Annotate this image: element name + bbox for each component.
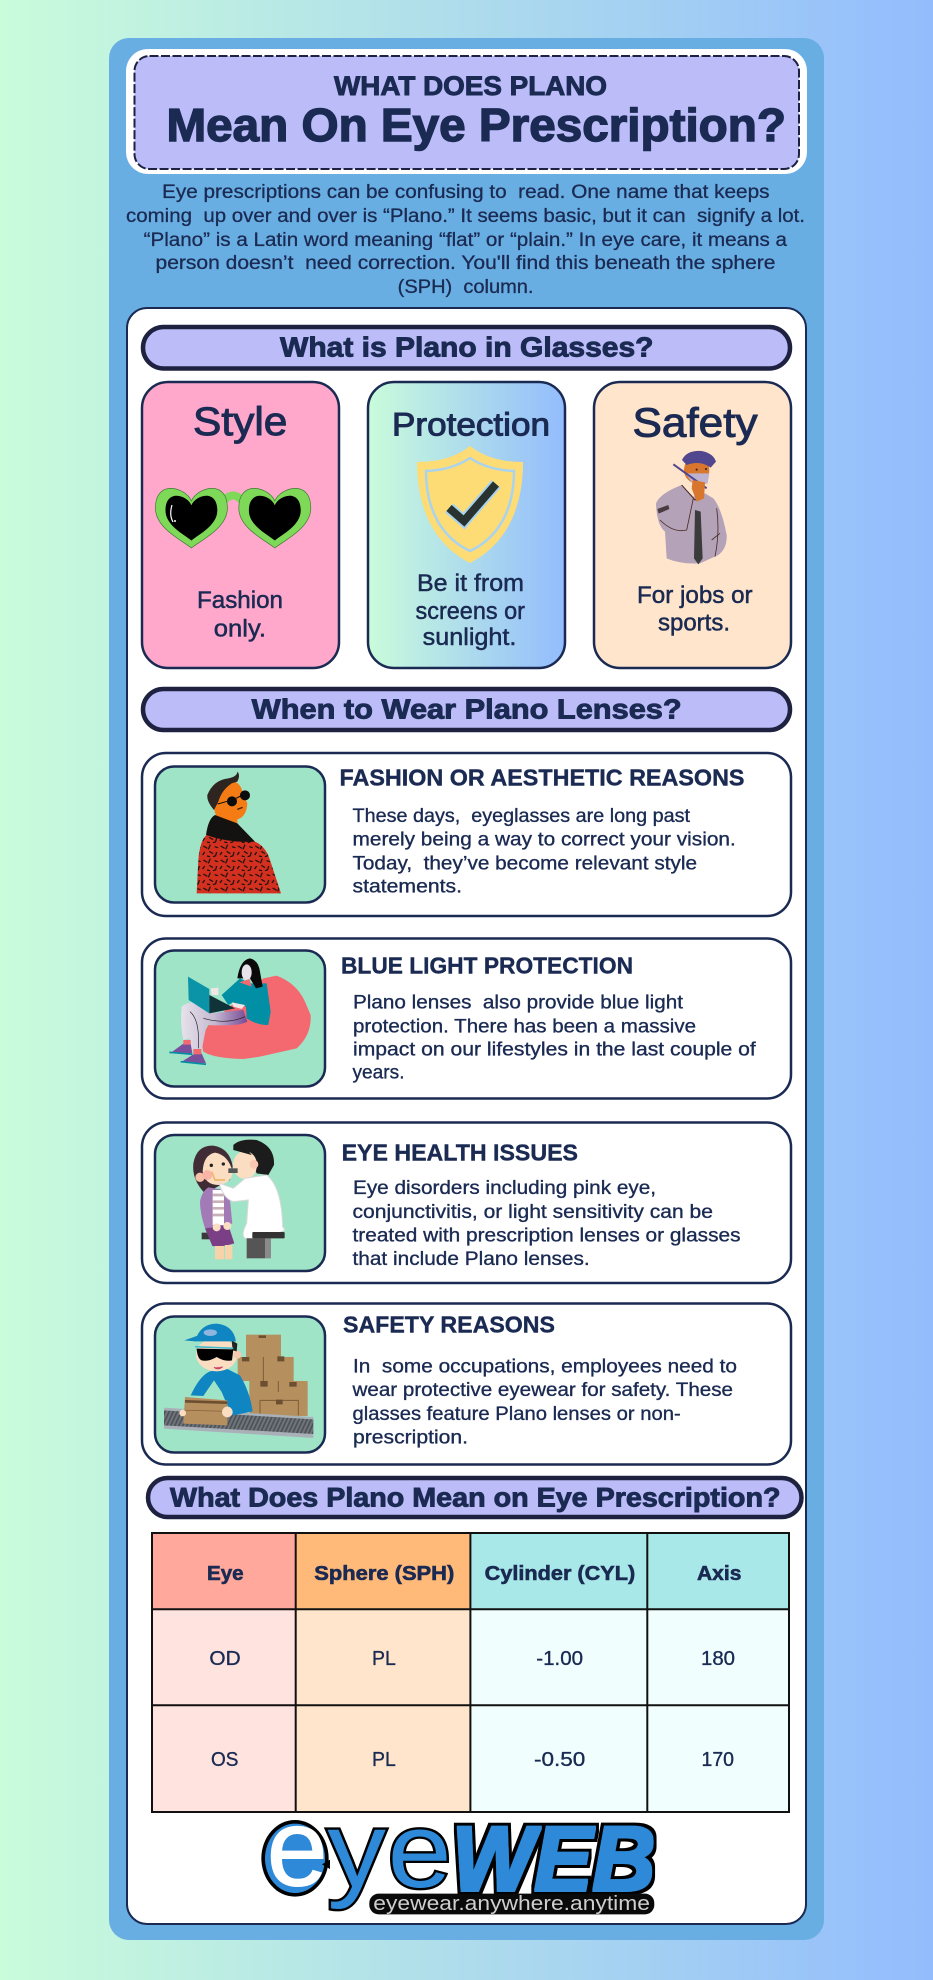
table row OD — [209, 1648, 735, 1670]
icon: stylish man with round sunglasses — [197, 772, 281, 893]
body text: prescription. — [353, 1426, 468, 1448]
table row OD: 180 — [701, 1648, 735, 1670]
title line 1: WHAT DOES PLANO — [334, 71, 607, 101]
body text — [352, 1177, 741, 1270]
card text: Be it from screens or sunlight: sunlight. — [423, 624, 516, 651]
logo tagline: eyewear.anywhere.anytime — [373, 1893, 650, 1915]
panel: safety reasons — [142, 1304, 791, 1464]
logo: eyeWEB — [261, 1787, 655, 1915]
body text: impact on our lifestyles in the last couple of — [353, 1039, 756, 1061]
panel: Style card — [142, 382, 339, 668]
body text: In some occupations, employees need to — [353, 1355, 737, 1377]
body text — [351, 1355, 737, 1448]
table header: Sphere (SPH) — [314, 1563, 454, 1585]
table header: Axis — [697, 1563, 741, 1585]
table: prescription example — [152, 1533, 789, 1812]
body text: statements. — [352, 876, 462, 898]
card text: Fashion only — [197, 587, 283, 643]
heading: What is Plano in Glasses?: What is Plano in Glasses? — [280, 332, 654, 363]
panel: blue light protection — [142, 938, 791, 1098]
body text: Today, they’ve become relevant style — [352, 852, 697, 874]
heading: What Does Plano Mean on Eye Prescription?: What Does Plano Mean on Eye Prescription? — [170, 1483, 780, 1513]
card text: Fashion only: Fashion — [197, 587, 283, 614]
body text: Eye disorders including pink eye, — [353, 1177, 656, 1199]
heading: SAFETY REASONS — [343, 1312, 555, 1338]
heading: When to Wear Plano Lenses? — [143, 689, 790, 730]
panel: white content — [127, 308, 806, 1924]
table row OS: OS — [211, 1749, 238, 1771]
icon: warehouse worker wearing protective glasses — [164, 1324, 313, 1438]
card text: Be it from screens or sunlight: Be it from — [417, 570, 524, 597]
body text: protection. There has been a massive — [353, 1015, 696, 1037]
card text: For jobs or sports: For jobs or — [637, 582, 753, 609]
body text: that include Plano lenses. — [352, 1248, 590, 1270]
body text: merely being a way to correct your vision. — [352, 829, 736, 851]
table row OS: 170 — [702, 1749, 734, 1771]
heading: What is Plano in Glasses? — [143, 327, 790, 368]
logo: eyeWEB: y — [327, 1790, 386, 1910]
body text: wear protective eyewear for safety. These — [351, 1379, 733, 1401]
body text: Plano lenses also provide blue light — [353, 991, 684, 1013]
table row OD: OD — [209, 1648, 241, 1670]
card text: For jobs or sports: sports. — [658, 610, 730, 637]
heading: BLUE LIGHT PROTECTION — [341, 952, 633, 978]
panel: fashion or aesthetic reasons — [142, 753, 791, 916]
body text: conjunctivitis, or light sensitivity can be — [352, 1201, 713, 1223]
body text: These days, eyeglasses are long past — [352, 805, 691, 827]
title line 2: Mean On Eye Prescription? — [166, 99, 786, 151]
icon: shield with check — [417, 446, 523, 563]
card title: Protection: Protection — [392, 407, 550, 443]
body text: glasses feature Plano lenses or non- — [352, 1403, 681, 1425]
heading: What Does Plano Mean on Eye Prescription? — [148, 1478, 802, 1517]
table header: Eye — [207, 1563, 244, 1585]
table row OS — [211, 1749, 734, 1771]
card text: Be it from screens or sunlight — [416, 570, 525, 651]
intro paragraph: “Plano” is a Latin word meaning “flat” or “plain.” In eye care, it means a — [144, 229, 787, 251]
heading: FASHION OR AESTHETIC REASONS — [340, 765, 744, 791]
intro paragraph — [126, 181, 805, 298]
table header: Cylinder (CYL) — [485, 1563, 635, 1585]
icon: person with laptop on beanbag — [169, 958, 311, 1064]
icon: heart sunglasses — [155, 488, 311, 548]
table row OS: -0.50 — [534, 1749, 585, 1771]
panel: eye health issues — [142, 1122, 791, 1283]
card text: Be it from screens or sunlight: screens or — [416, 598, 525, 625]
body text — [352, 805, 736, 898]
table row OD: PL — [372, 1648, 396, 1670]
logo: eyeWEB: e — [388, 1790, 452, 1910]
intro paragraph: person doesn’t need correction. You'll find this beneath the sphere — [156, 252, 776, 274]
intro paragraph: coming up over and over is “Plano.” It seems basic, but it can signify a lot. — [126, 205, 805, 227]
icon: security guard — [656, 451, 727, 564]
title banner — [126, 49, 807, 174]
intro paragraph: (SPH) column. — [398, 276, 534, 298]
card title: Safety: Safety — [632, 400, 758, 446]
heading: EYE HEALTH ISSUES — [342, 1140, 578, 1166]
table row OS: PL — [372, 1749, 396, 1771]
panel: blue backing — [109, 38, 824, 1940]
panel: Protection card — [368, 382, 565, 668]
card text: Fashion only: only. — [214, 616, 266, 643]
panel: Safety card — [594, 382, 791, 668]
body text: years. — [352, 1061, 404, 1083]
heading: When to Wear Plano Lenses?: When to Wear Plano Lenses? — [252, 693, 682, 724]
intro paragraph: Eye prescriptions can be confusing to read. One name that keeps — [162, 181, 770, 203]
table header — [207, 1563, 741, 1585]
logo: eyeWEB: WEB — [452, 1808, 655, 1910]
icon: doctor examining patient's eye — [193, 1140, 285, 1259]
card text: For jobs or sports — [637, 582, 753, 637]
body text — [352, 991, 756, 1083]
body text: treated with prescription lenses or glasses — [352, 1225, 741, 1247]
table row OD: -1.00 — [536, 1648, 583, 1670]
card title: Style: Style — [193, 400, 287, 444]
logo: eyeWEB: e — [267, 1787, 328, 1910]
